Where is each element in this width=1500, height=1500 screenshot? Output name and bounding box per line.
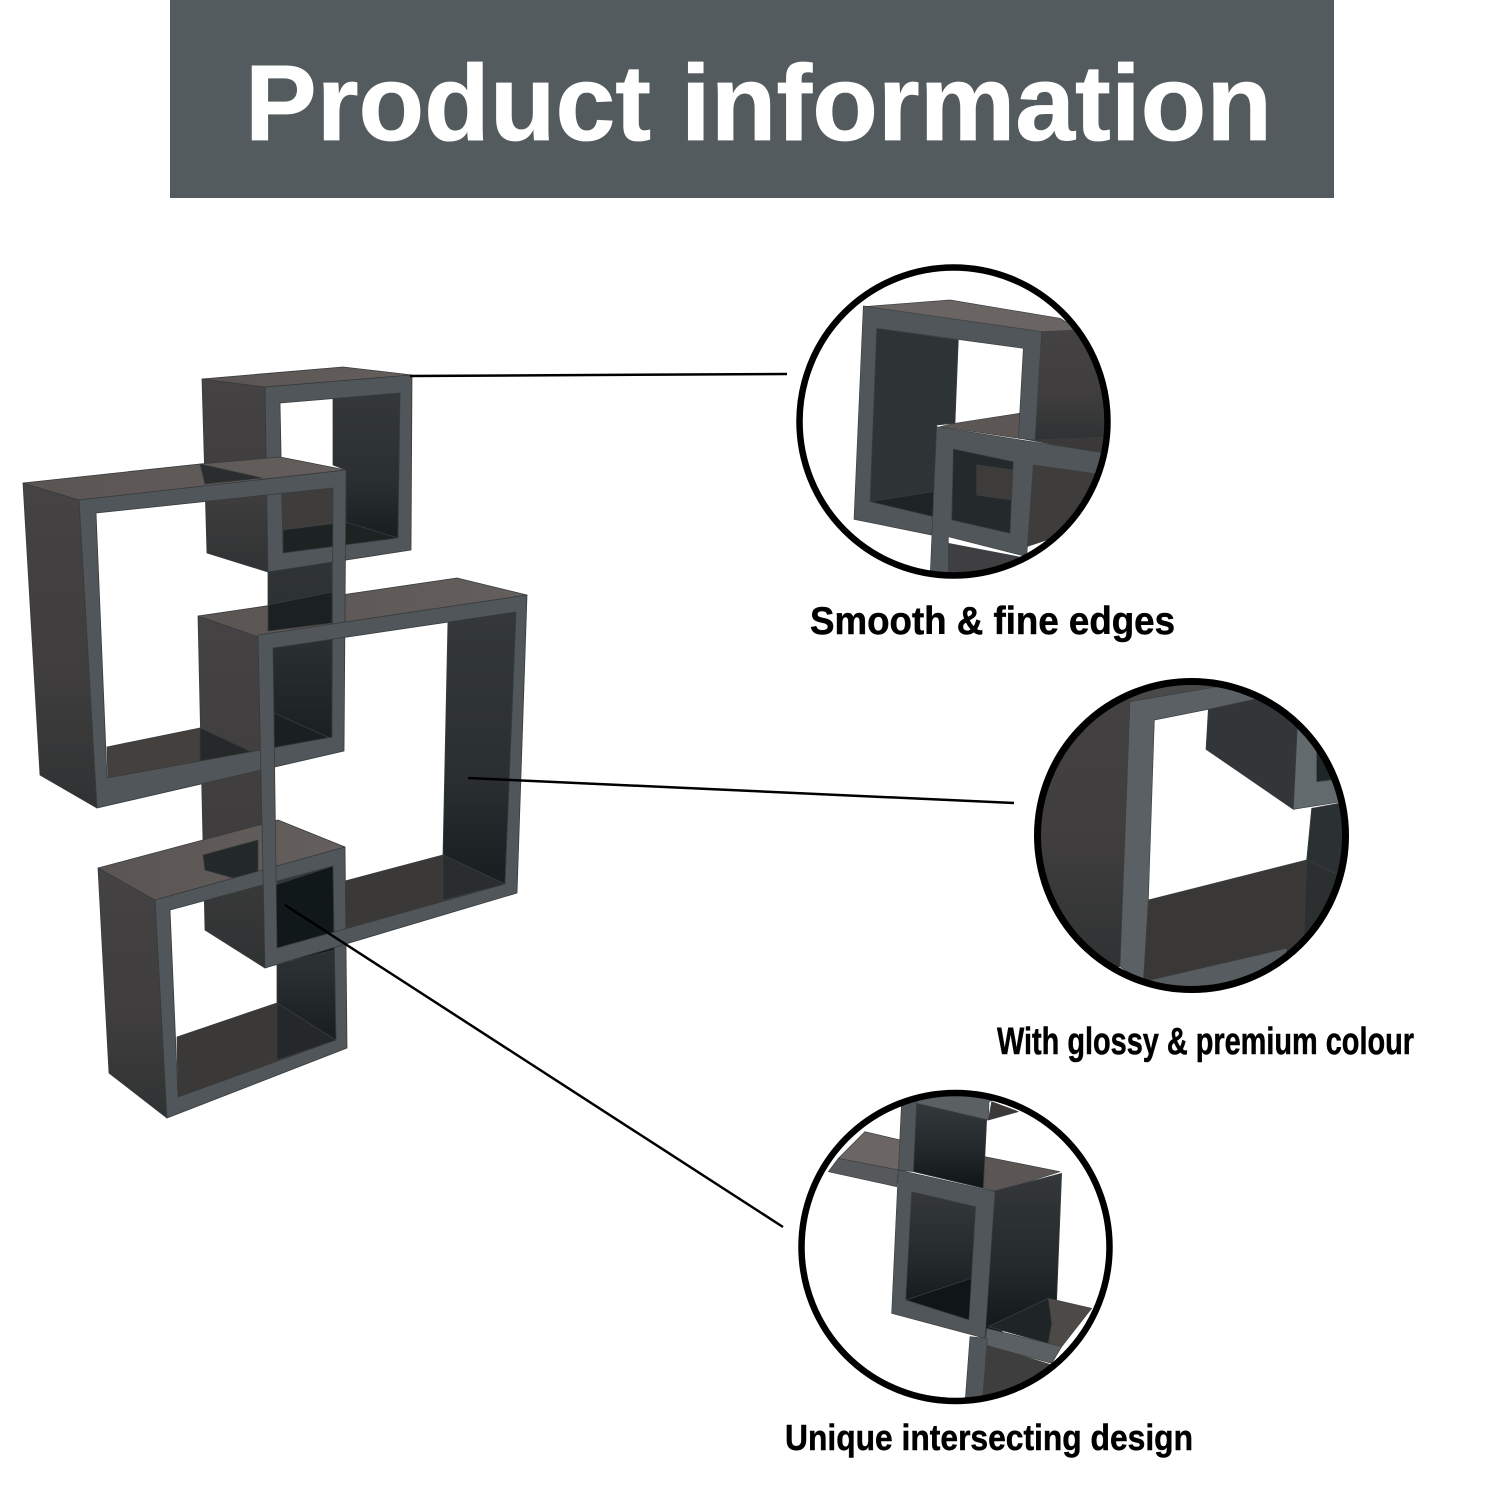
middle large cube: front face	[258, 595, 527, 968]
caption: intersecting design: Unique intersecting design	[785, 1417, 1193, 1458]
middle large cube: top, interior	[198, 578, 527, 935]
leader line: edges	[410, 374, 787, 376]
left cube inner right wall	[268, 480, 332, 752]
caption: smooth edges: Smooth & fine edges	[810, 600, 1175, 643]
detail circle: intersecting design	[802, 1090, 1110, 1403]
title banner	[170, 0, 1334, 198]
bottom small cube	[98, 616, 347, 1118]
title text: Product information	[245, 42, 1272, 163]
detail circle: smooth edges	[800, 268, 1117, 580]
left large cube	[23, 457, 346, 808]
top small cube	[202, 367, 412, 572]
leader line: design	[285, 905, 783, 1227]
product: intersecting cube shelves	[23, 367, 527, 1118]
leader line: colour	[468, 778, 1014, 803]
detail circle: glossy colour	[1034, 678, 1349, 993]
